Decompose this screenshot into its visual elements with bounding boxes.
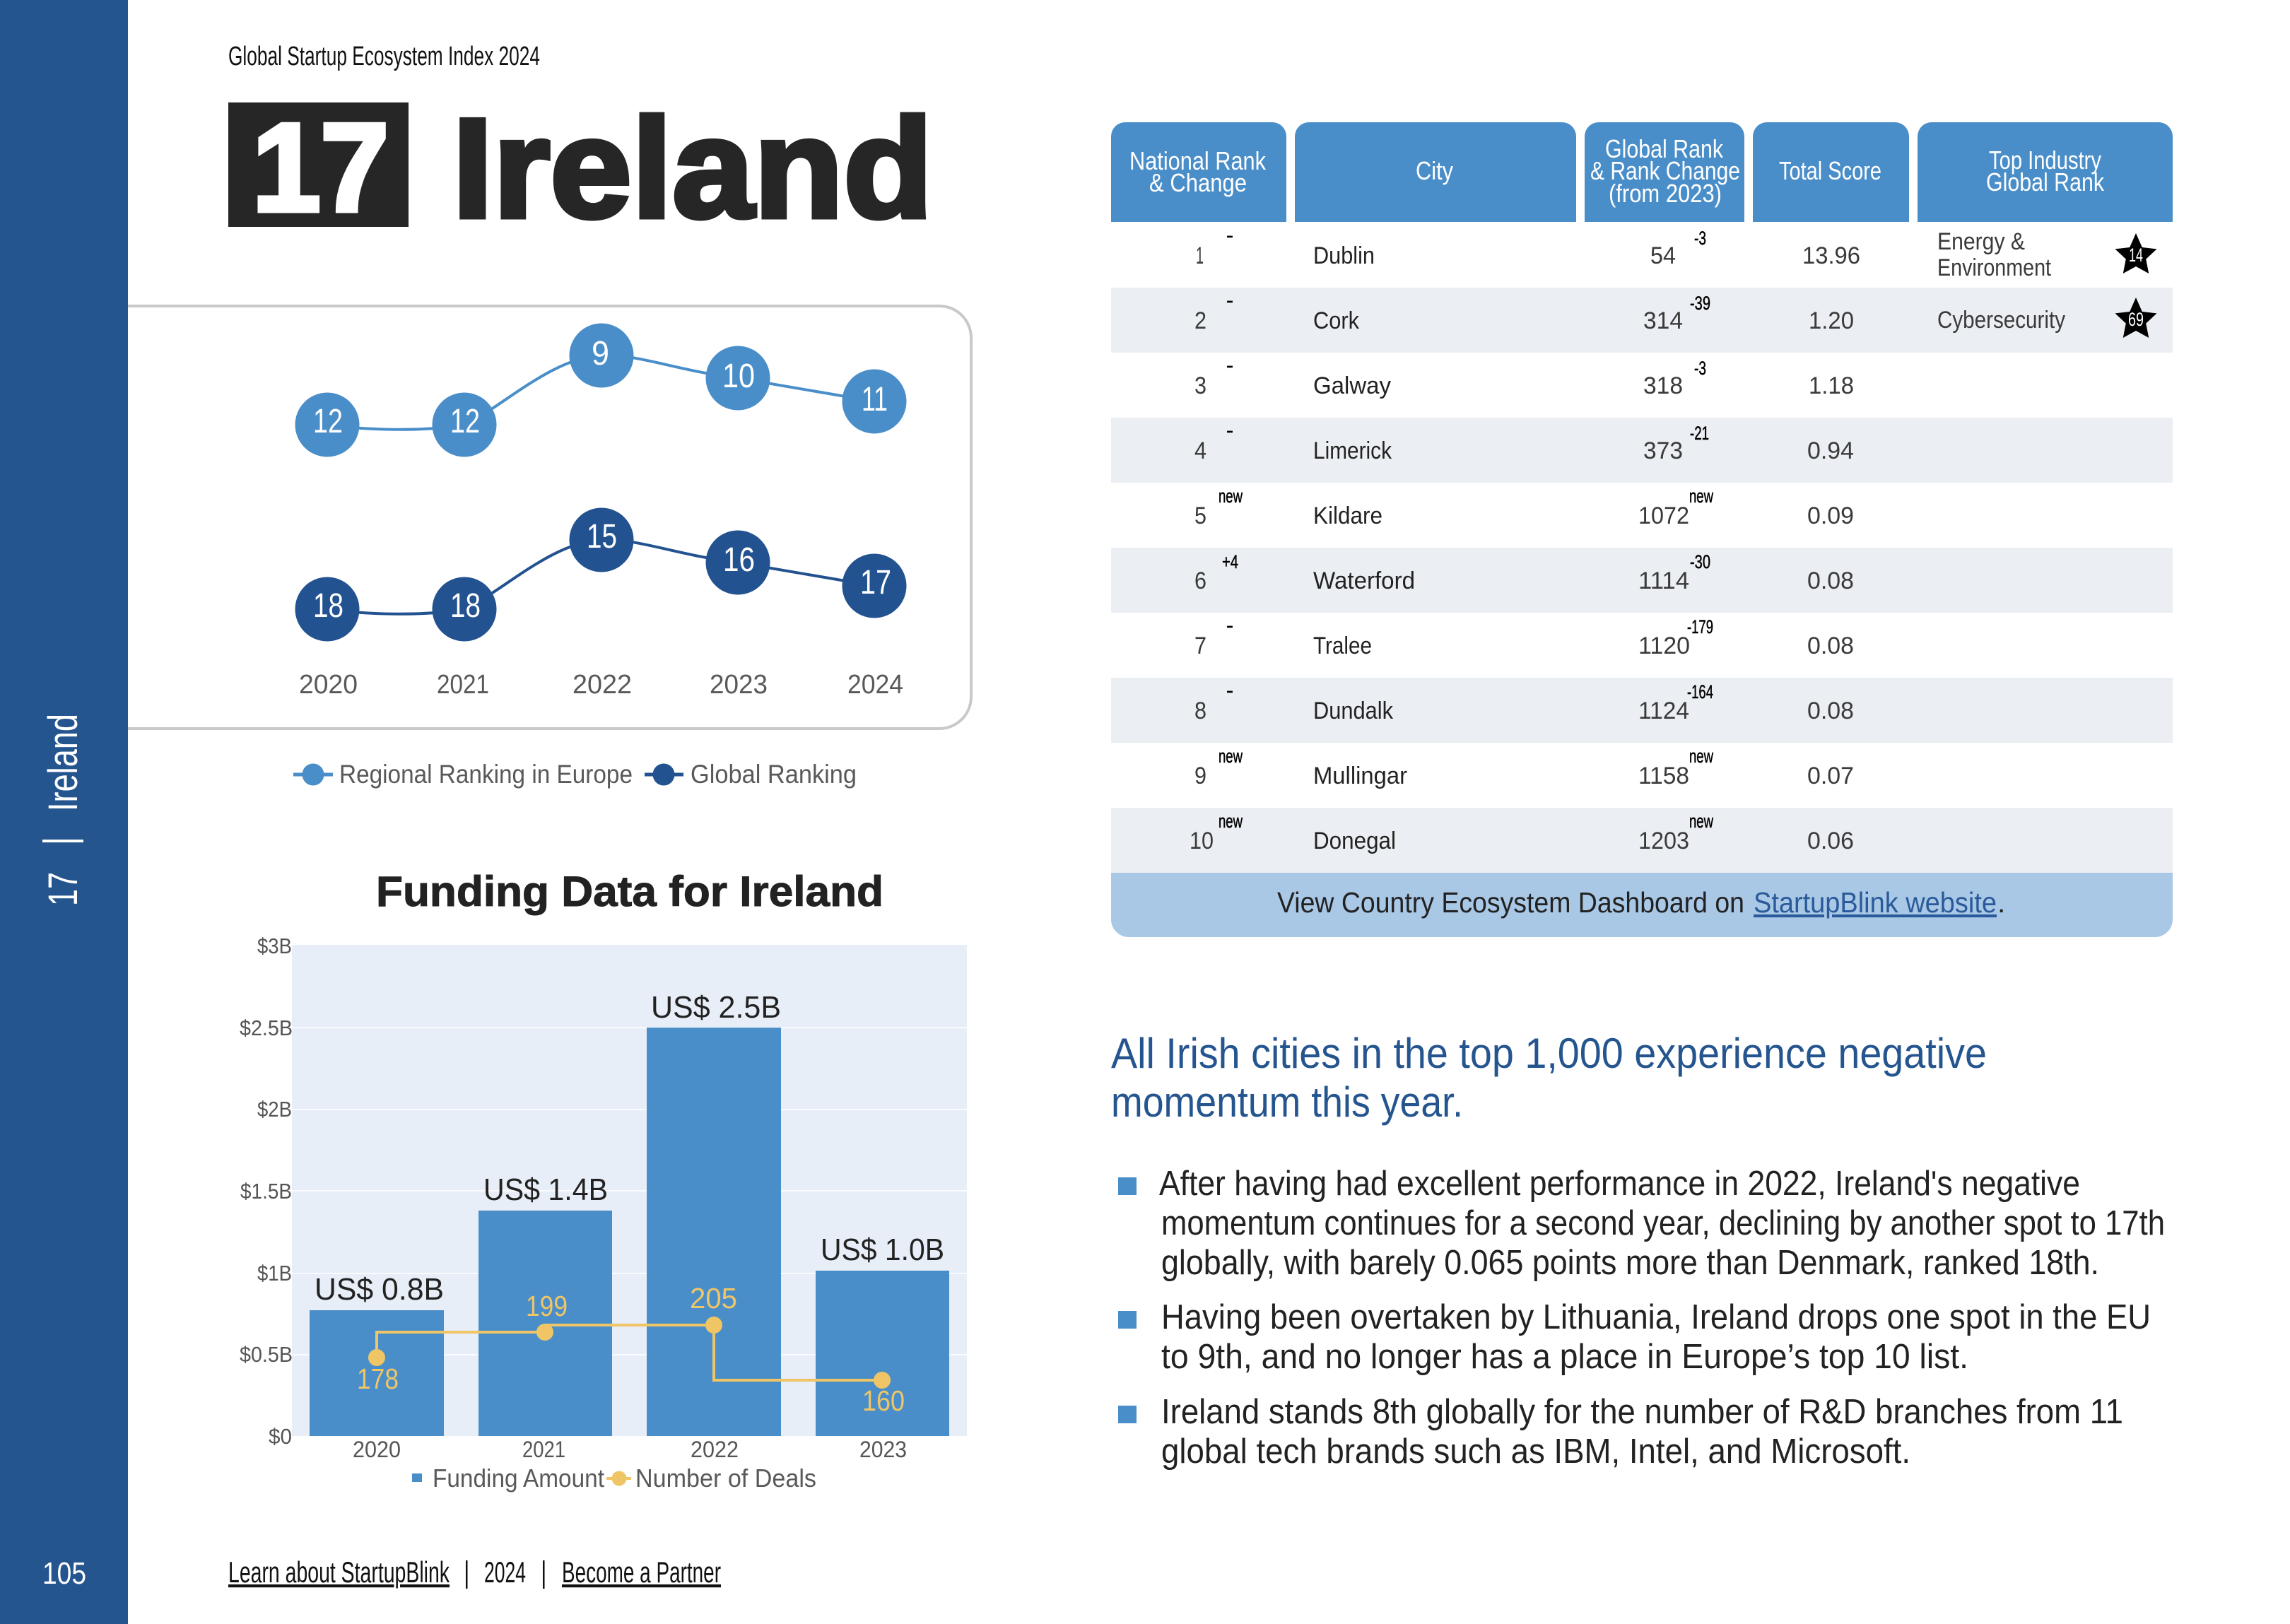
funding value labels: US$ 1.4B: [483, 1172, 608, 1207]
row: Dundalk: -164: [1687, 681, 1713, 702]
row: Dundalk: Dundalk: [1313, 698, 1394, 724]
table header: & Rank Change: [1590, 156, 1740, 185]
row: Kildare: [1194, 486, 1854, 529]
row: Galway: -: [1226, 355, 1233, 376]
row: Waterford: [1194, 551, 1854, 594]
row: Donegal: 1203: [1638, 828, 1689, 854]
x axis labels: [353, 1437, 907, 1462]
row: Limerick: -21: [1690, 423, 1709, 444]
table header: [1111, 122, 2173, 222]
row: Tralee: [1194, 615, 1854, 659]
row: Galway: 3: [1194, 372, 1206, 399]
footer links: Become a Partner: [562, 1555, 721, 1589]
row: Donegal: new: [1219, 811, 1243, 832]
y axis labels: $2.5B: [240, 1016, 293, 1040]
sidebar country label: Ireland: [40, 714, 86, 811]
row: Mullingar: Mullingar: [1313, 763, 1407, 789]
row: Mullingar: new: [1219, 746, 1243, 767]
year axis labels: 2023: [710, 670, 768, 700]
row: Kildare: 5: [1194, 502, 1206, 529]
row: Limerick: 4: [1194, 437, 1206, 464]
regional ranking line: 10: [722, 358, 755, 395]
global ranking line: 15: [587, 518, 617, 555]
row: Mullingar: [1194, 746, 1854, 789]
row: Tralee: -: [1226, 615, 1233, 636]
number of deals step line: 199: [526, 1290, 568, 1322]
row: Cork: -39: [1690, 293, 1710, 314]
row: Cork: Cork: [1313, 307, 1360, 334]
funding legend: [412, 1464, 816, 1493]
table header: Top Industry: [1989, 146, 2101, 175]
table header: Total Score: [1779, 156, 1881, 185]
row: Dundalk: 0.08: [1807, 698, 1854, 724]
row: Dublin: 1: [1196, 242, 1204, 269]
row: Limerick: 0.94: [1807, 437, 1854, 464]
number of deals step line: 160: [862, 1384, 905, 1417]
row: Limerick: Limerick: [1313, 437, 1392, 464]
dashboard link bar: .: [1997, 886, 2005, 919]
bullet 1: momentum continues for a second year, declining by another spot to 17th: [1161, 1204, 2165, 1242]
row: Tralee: -179: [1687, 616, 1713, 637]
insight heading: [1111, 1030, 1987, 1126]
row: Waterford: -30: [1690, 551, 1710, 572]
y axis labels: $3B: [257, 934, 292, 958]
row: Donegal: 0.06: [1807, 828, 1854, 854]
row: Tralee: 0.08: [1807, 632, 1854, 659]
bullet 2: [1118, 1298, 2151, 1376]
row: Cork: 2: [1194, 307, 1206, 334]
row: Mullingar: 9: [1194, 763, 1206, 789]
x axis labels: 2023: [859, 1437, 907, 1462]
bullet list: [1118, 1165, 2165, 1471]
regional ranking line: 11: [862, 381, 888, 418]
ranking legend: Regional Ranking in Europe: [339, 760, 633, 789]
icon: star rank 69: 69: [2128, 309, 2144, 330]
row: Waterford: 6: [1194, 567, 1206, 594]
funding value labels: [315, 990, 944, 1307]
bullet 3: global tech brands such as IBM, Intel, and Microsoft.: [1161, 1432, 1910, 1471]
ranking legend: Global Ranking: [691, 760, 857, 789]
row: Mullingar: 0.07: [1807, 763, 1854, 789]
footer links: Learn about StartupBlink: [228, 1555, 450, 1589]
funding legend: Number of Deals: [635, 1464, 816, 1493]
regional ranking line: 9: [592, 335, 609, 372]
regional ranking line: [295, 324, 906, 457]
funding legend: Funding Amount: [433, 1464, 604, 1493]
row: Kildare: new: [1689, 486, 1713, 507]
year axis labels: 2021: [437, 670, 489, 700]
x axis labels: 2021: [522, 1437, 565, 1462]
row: Cork: 314: [1643, 307, 1683, 334]
table header: Global Rank: [1605, 134, 1724, 163]
row: Waterford: +4: [1222, 551, 1238, 572]
row: Dundalk: [1194, 680, 1854, 724]
sidebar country label: 17: [40, 872, 86, 906]
icon: star rank 14: [2115, 233, 2157, 273]
ecosystem table: [1111, 122, 2173, 937]
row: Tralee: 1120: [1638, 632, 1690, 659]
regional ranking line: 12: [313, 403, 343, 440]
row: Cork: -: [1226, 290, 1233, 311]
bullet 3: [1118, 1393, 2123, 1471]
row: Cork: [1194, 290, 2065, 334]
row: Limerick: [1194, 420, 1854, 464]
row: Galway: [1194, 355, 1854, 399]
row: Dundalk: 1124: [1638, 698, 1689, 724]
global ranking line: 18: [450, 587, 481, 625]
global ranking line: 18: [313, 587, 344, 625]
row: Waterford: Waterford: [1313, 567, 1415, 594]
dashboard link bar: [1111, 873, 2173, 937]
row: Tralee: 7: [1194, 632, 1206, 659]
bullet 1: globally, with barely 0.065 points more than Denmark, ranked 18th.: [1161, 1244, 2099, 1282]
global ranking line: 17: [860, 564, 891, 601]
row: Limerick: 373: [1643, 437, 1683, 464]
global ranking line: 16: [723, 541, 755, 579]
bullet 3: Ireland stands 8th globally for the number of R&D branches from 11: [1161, 1393, 2123, 1431]
row: Galway: 1.18: [1809, 372, 1854, 399]
row: Cork: Cybersecurity: [1937, 307, 2065, 334]
x axis labels: 2020: [353, 1437, 401, 1462]
year axis labels: 2022: [572, 670, 632, 700]
row: Dublin: -3: [1694, 228, 1706, 249]
bullet 2: Having been overtaken by Lithuania, Ireland drops one spot in the EU: [1161, 1298, 2151, 1336]
bullet 2: to 9th, and no longer has a place in Europe’s top 10 list.: [1161, 1338, 1968, 1376]
row: Dublin: Dublin: [1313, 242, 1375, 269]
rank badge: 17: [252, 98, 389, 237]
y axis labels: $0.5B: [240, 1342, 293, 1367]
row: Mullingar: new: [1689, 746, 1713, 767]
sidebar: [0, 0, 128, 1624]
row: Galway: -3: [1694, 358, 1706, 379]
row: Donegal: 10: [1190, 828, 1214, 854]
row: Galway: Galway: [1313, 372, 1391, 399]
year axis labels: 2024: [847, 670, 903, 700]
row: Kildare: 0.09: [1807, 502, 1854, 529]
row: Donegal: new: [1689, 811, 1713, 832]
row: Dundalk: -: [1226, 680, 1233, 701]
x axis labels: 2022: [691, 1437, 739, 1462]
table header: City: [1416, 156, 1453, 185]
bullet 1: After having had excellent performance in 2022, Ireland's negative: [1159, 1165, 2080, 1203]
row: Dublin: Energy &: [1937, 228, 2025, 255]
panel: ranking chart: [128, 306, 971, 729]
row: Dublin: Environment: [1937, 254, 2051, 281]
alternating row backgrounds: [1111, 288, 2173, 873]
table header: & Change: [1149, 168, 1247, 197]
y axis labels: $1.5B: [240, 1179, 292, 1204]
report title: Global Startup Ecosystem Index 2024: [228, 42, 540, 71]
row: Galway: 318: [1643, 372, 1683, 399]
row: Waterford: 0.08: [1807, 567, 1854, 594]
dashboard link bar: StartupBlink website: [1754, 886, 1997, 919]
y axis labels: [240, 934, 293, 1449]
funding bar chart: [240, 934, 967, 1462]
country name heading: Ireland: [452, 90, 933, 247]
table header: (from 2023): [1609, 179, 1722, 208]
number of deals step line: 178: [357, 1363, 399, 1395]
icon: star rank 69: [2115, 298, 2157, 338]
number of deals step line: [357, 1282, 905, 1417]
global ranking line: [295, 507, 906, 642]
bullet 1: [1118, 1165, 2165, 1282]
funding value labels: US$ 2.5B: [651, 990, 781, 1025]
sidebar country label: [40, 714, 86, 906]
row: Limerick: -: [1226, 420, 1233, 441]
icon: star rank 14: 14: [2129, 245, 2143, 266]
year axis labels: 2020: [299, 670, 358, 700]
page number: 105: [42, 1556, 86, 1591]
insight heading: momentum this year.: [1111, 1078, 1463, 1126]
row: Dublin: 13.96: [1802, 242, 1860, 269]
row: Waterford: 1114: [1638, 567, 1689, 594]
table header: National Rank: [1129, 146, 1267, 175]
funding bars: [310, 1028, 949, 1436]
row: Donegal: Donegal: [1313, 828, 1396, 854]
row: Dundalk: 8: [1194, 698, 1206, 724]
table header: Global Rank: [1986, 167, 2105, 196]
footer links: [228, 1555, 721, 1589]
row: Mullingar: 1158: [1638, 763, 1689, 789]
row: Dublin: [1196, 225, 2051, 281]
funding value labels: US$ 1.0B: [821, 1232, 944, 1267]
row: Donegal: [1190, 811, 1854, 854]
row: Dublin: 54: [1650, 242, 1676, 269]
funding value labels: US$ 0.8B: [315, 1272, 444, 1307]
y axis labels: $0: [269, 1424, 292, 1449]
row: Tralee: Tralee: [1313, 632, 1372, 659]
footer links: 2024: [484, 1555, 526, 1589]
row: Kildare: 1072: [1638, 502, 1689, 529]
ranking legend: [293, 760, 857, 789]
y axis labels: $1B: [257, 1261, 292, 1285]
number of deals step line: 205: [690, 1282, 737, 1314]
row: Cork: 1.20: [1809, 307, 1854, 334]
row: Kildare: new: [1219, 486, 1243, 507]
regional ranking line: 12: [450, 403, 480, 440]
insight heading: All Irish cities in the top 1,000 experience negative: [1111, 1030, 1987, 1077]
dashboard link bar: View Country Ecosystem Dashboard on: [1277, 886, 1744, 919]
year axis labels: [299, 670, 903, 700]
row: Kildare: Kildare: [1313, 502, 1382, 529]
y axis labels: $2B: [257, 1097, 292, 1122]
row: Dublin: -: [1226, 225, 1233, 246]
funding chart heading: Funding Data for Ireland: [376, 868, 883, 915]
